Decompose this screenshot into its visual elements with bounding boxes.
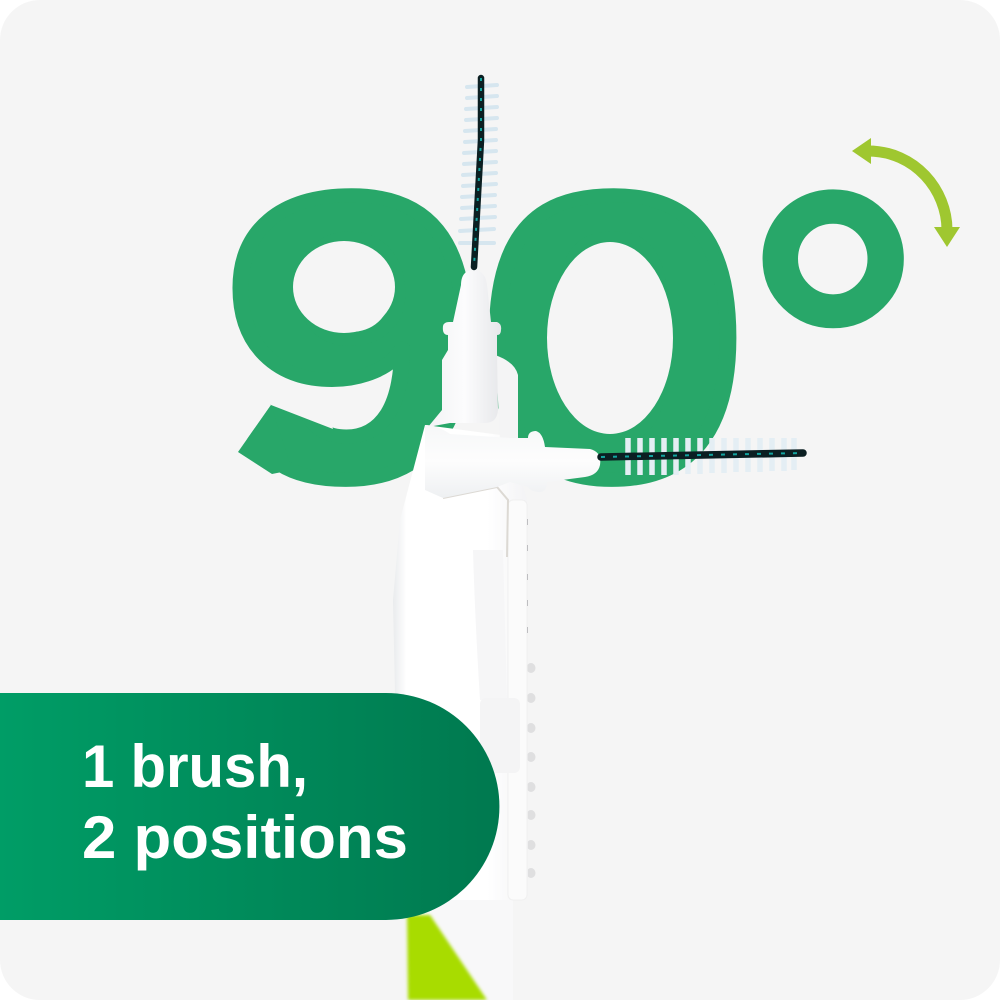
vertical brush cap bbox=[428, 270, 501, 427]
notch line bbox=[443, 487, 508, 557]
big heading: 90 degrees: 0 bbox=[478, 113, 748, 562]
vertical brush bbox=[460, 78, 497, 267]
grip strip bbox=[508, 500, 527, 900]
callout pill bbox=[0, 693, 499, 920]
horizontal brush cap bbox=[425, 425, 600, 498]
bristles bbox=[628, 438, 794, 475]
side slot bbox=[473, 550, 507, 700]
callout text: 2 positions bbox=[82, 804, 408, 871]
grip dots bbox=[526, 519, 528, 633]
wire bbox=[601, 453, 803, 457]
main handle body bbox=[393, 425, 528, 900]
big heading: 90 degrees: ° bbox=[744, 98, 922, 595]
interdental brush handle bbox=[393, 270, 600, 1000]
bristles bbox=[460, 85, 497, 243]
icon: rotation arrow bbox=[852, 138, 960, 247]
horizontal brush bbox=[601, 438, 803, 475]
big heading: 90 degrees bbox=[224, 98, 922, 595]
grip ridges bbox=[526, 663, 536, 878]
callout text bbox=[82, 733, 408, 871]
wire bbox=[474, 78, 481, 267]
sliding tab bbox=[480, 698, 520, 773]
lime handle colour bbox=[407, 915, 487, 1000]
callout text: 1 brush, bbox=[82, 733, 308, 800]
big heading: 90 degrees: 9 bbox=[224, 112, 482, 561]
strip behind joint bbox=[495, 355, 518, 440]
lower handle bbox=[407, 890, 513, 1000]
